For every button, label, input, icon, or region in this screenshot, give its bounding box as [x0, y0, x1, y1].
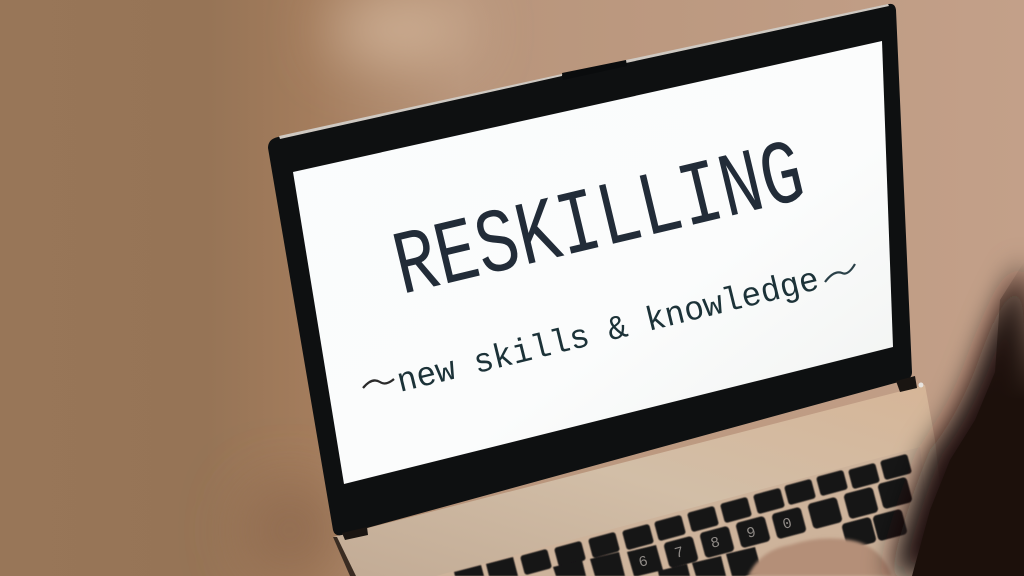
hinges — [342, 376, 917, 540]
number key row — [553, 477, 913, 576]
keyboard — [454, 454, 913, 576]
key legends: 6 — [637, 553, 650, 572]
person silhouette foreground — [890, 262, 1024, 576]
hand on keyboard — [748, 538, 892, 576]
keyboard well — [436, 447, 935, 576]
key legends: 9 — [745, 524, 758, 543]
hinge glint — [918, 382, 924, 388]
subtitle text: new skills & knowledge — [393, 262, 823, 403]
key legends: 0 — [781, 515, 794, 534]
function key row — [454, 454, 912, 576]
lid top edge highlight — [279, 4, 889, 139]
letter key row — [658, 509, 908, 576]
key legends: 8 — [709, 534, 722, 553]
key legends: 7 — [673, 544, 686, 563]
left tilde — [363, 379, 394, 388]
key legends — [637, 515, 794, 572]
main title text: RESKILLING — [385, 125, 815, 321]
laptop — [268, 4, 950, 576]
laptop base deck — [333, 385, 950, 576]
webcam notch — [562, 60, 627, 80]
right tilde — [825, 264, 855, 282]
screen — [293, 41, 893, 484]
laptop lid bezel — [268, 4, 912, 535]
base left edge — [333, 537, 356, 576]
